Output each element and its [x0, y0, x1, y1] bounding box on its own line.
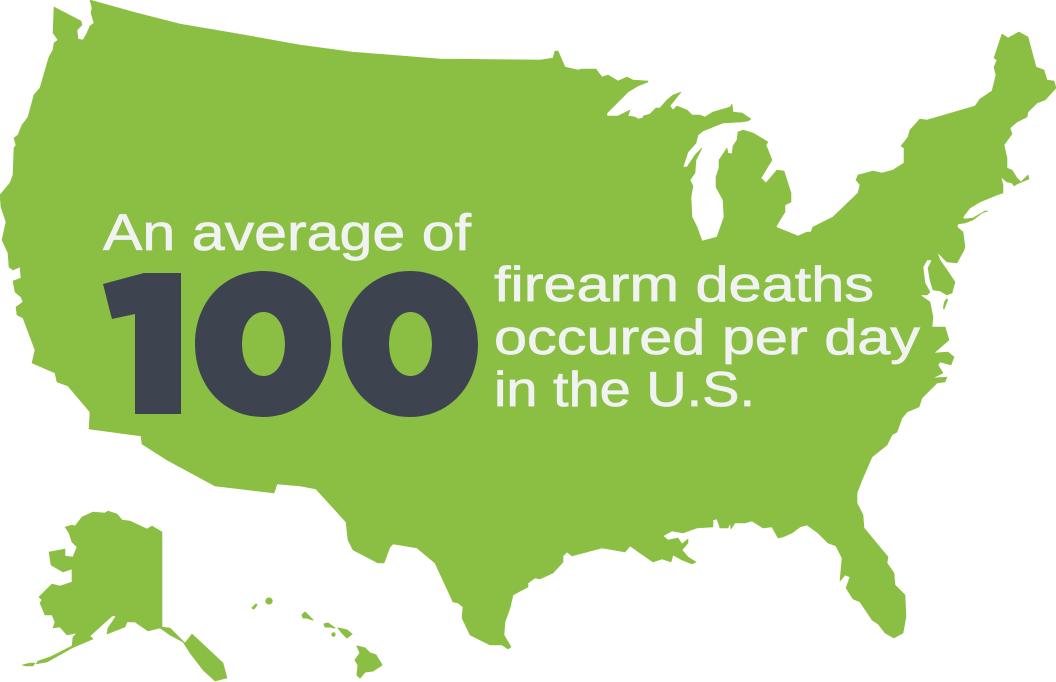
- text: firearm deaths occured per day in the U.S.: [494, 258, 921, 417]
- big number: 100: 0: [207, 232, 319, 457]
- big number: 100: [103, 271, 478, 417]
- map: Hawaii: [252, 598, 382, 678]
- big number: 100: 1: [94, 232, 194, 457]
- text: firearm deaths occured per day in the U.S.: firearm deaths: [494, 258, 874, 312]
- text: firearm deaths occured per day in the U.S.: occured per day: [494, 311, 921, 365]
- map: Virginia eastern shore island: [943, 298, 948, 310]
- big number: 100: 0: [354, 232, 466, 457]
- text: An average of: An average of: [103, 204, 472, 261]
- text: firearm deaths occured per day in the U.S.: in the U.S.: [494, 363, 755, 417]
- map: Alaska: [22, 511, 227, 681]
